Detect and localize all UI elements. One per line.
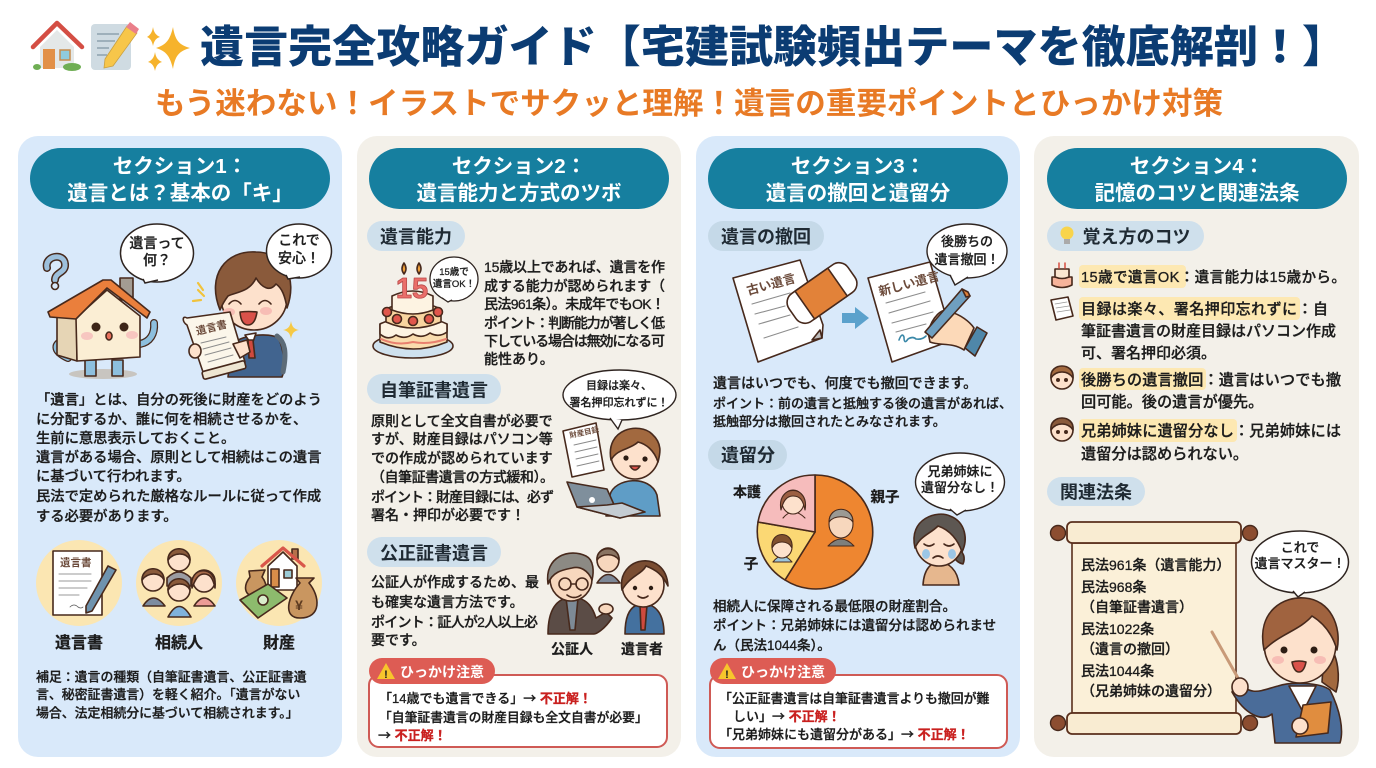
text: capacity: 能性あり。 [484, 351, 554, 367]
speech bubble: peace of mind: 安心！ [278, 250, 320, 266]
speech bubble: peace of mind: これで [278, 232, 320, 248]
section 1 heading: 遺言とは？基本の「キ」 [67, 182, 293, 205]
label: heirs: 相続人 [155, 634, 203, 652]
text: capacity: ポイント：判断能力が著しく低 [484, 315, 665, 331]
panel: section 2 [357, 136, 681, 757]
text: holographic will: での作成が認められています [371, 450, 553, 466]
icon: question mark [47, 257, 65, 290]
text: holographic will: すが、財産目録はパソコン等 [371, 431, 553, 447]
scroll text: legal articles: 民法968条 [1081, 579, 1146, 595]
pie portrait: spouse [780, 490, 806, 518]
text: statutory share: ポイント：兄弟姉妹には遺留分は認められませ [713, 617, 996, 633]
text: notarized will: 公証人が作成するため、最 [371, 574, 539, 590]
icon: small document [1051, 297, 1073, 320]
illustration: new will with hand and pen: 新しい遺言 [877, 268, 941, 299]
subheading: revocation: 遺言の撤回 [721, 227, 811, 247]
illustration: inventory and boy with laptop [563, 423, 660, 518]
title: 遺言完全攻略ガイド【宅建試験頻出テーマを徹底解剖！】 [200, 23, 1346, 72]
icon: sparkles emoji [147, 27, 190, 71]
panel: section 4 [1034, 136, 1359, 757]
icon: house emoji [33, 23, 82, 71]
section 4 heading: 記憶のコツと関連法条 [1094, 181, 1300, 205]
text: supplement note: 言、秘密証書遺言）を軽く紹介。「遺言がない [36, 687, 300, 702]
subheading: notarized will [367, 537, 501, 567]
text: notarized will: も確実な遺言方法です。 [371, 594, 524, 610]
tips: highlight bars [1079, 265, 1300, 442]
subheading: revocation [708, 221, 824, 251]
text: revocation: 抵触部分は撤回されたとみなされます。 [713, 414, 946, 429]
speech bubble: master: 遺言マスター！ [1254, 556, 1346, 571]
speech bubble: peace of mind [266, 224, 332, 279]
callout: trick warning 1: ! [384, 669, 388, 681]
scroll text: legal articles: （兄弟姉妹の遺留分） [1081, 683, 1221, 699]
speech bubble: what is a will: 何？ [143, 252, 171, 268]
section 3 heading: セクション3： [791, 155, 925, 178]
text: holographic will [371, 413, 554, 523]
text: statutory share [713, 598, 996, 653]
label: spouse: 本護 [733, 484, 761, 500]
arrow: old to new will [842, 307, 869, 329]
tip: later will [1081, 372, 1341, 411]
text: what is a will: に基づいて行われます。 [36, 468, 191, 485]
callout: trick warning 2: 「公正証書遺言は自筆証書遺言よりも撤回が難 [719, 691, 990, 706]
subheading: related articles: 関連法条 [1060, 482, 1132, 502]
label: child: 子 [744, 556, 758, 573]
text: notarized will [371, 574, 539, 648]
illustration: new will with hand and pen [868, 262, 987, 362]
subheading: statutory share [708, 440, 787, 470]
tip: siblings: 遺留分は認められない。 [1081, 446, 1248, 463]
speech bubble: master [1252, 531, 1348, 597]
illustration: testator [622, 561, 668, 634]
subtitle: もう迷わない！イラストでサクッと理解！遺言の重要ポイントとひっかけ対策 [155, 87, 1223, 121]
text: what is a will: に分配するか、誰に何を相続させるかを、 [36, 410, 307, 428]
section 3 heading: 遺言の撤回と遺留分 [766, 182, 951, 205]
callout: trick warning 1: ひっかけ注意 [400, 664, 484, 680]
icon: memo and pencil emoji [91, 22, 139, 70]
subheading: related articles [1047, 477, 1145, 506]
scroll text: legal articles: 民法1044条 [1081, 663, 1154, 679]
icon: assets house and money: ¥ [295, 597, 303, 613]
illustration: inventory and boy with laptop: 財産目録 [568, 424, 600, 440]
subheading: capacity: 遺言能力 [380, 227, 452, 247]
speech bubble: OK at 15: 15歳で [439, 266, 469, 278]
text: holographic will: 原則として全文自書が必要で [371, 413, 553, 429]
label: assets: 財産 [263, 633, 295, 652]
icon: heirs family [136, 540, 222, 626]
panel: section 1 [18, 136, 342, 757]
text: capacity: 民法961条）。未成年でもOK！ [484, 296, 665, 312]
speech bubble: OK at 15: 遺言OK！ [433, 278, 475, 290]
icon: small cake [1052, 263, 1072, 288]
text: notarized will: 要です。 [371, 632, 426, 648]
speech bubble: later will wins: 遺言撤回！ [934, 252, 1000, 267]
callout: trick warning 2: 「兄弟姉妹にも遺留分がある」→ 不正解！ [719, 724, 970, 743]
subheading: memory tips: 覚え方のコツ [1082, 226, 1190, 247]
speech bubble: inventory: 目録は楽々、 [586, 378, 652, 392]
illustration: happy man with will [183, 252, 299, 380]
text: what is a will: 「遺言」とは、自分の死後に財産をどのよう [36, 390, 322, 408]
subheading: statutory share: 遺留分 [721, 446, 775, 466]
tip: inventory [1081, 301, 1336, 362]
icon: will document [36, 540, 122, 626]
illustration: birthday cake: 15 [396, 273, 428, 305]
section 4 heading [1047, 148, 1347, 209]
scroll text: legal articles: 民法961条（遺言能力） [1081, 557, 1230, 573]
text: what is a will: する必要があります。 [36, 507, 178, 525]
callout: trick warning 2: ひっかけ注意 [741, 664, 825, 680]
subheading: capacity [367, 221, 465, 251]
illustration: teacher with pointer [1212, 598, 1342, 743]
illustration: witness [597, 548, 620, 583]
section 1 heading [30, 148, 330, 209]
text: capacity: 成する能力が認められます（ [484, 278, 665, 294]
tip: siblings [1081, 423, 1341, 463]
section 2 heading: 遺言能力と方式のツボ [416, 182, 622, 205]
text: holographic will: ポイント：財産目録には、必ず [371, 489, 554, 505]
callout: trick warning 1 [369, 658, 667, 747]
tip: inventory: 目録は楽々、署名押印忘れずに：自 [1081, 301, 1328, 318]
speech bubble: OK at 15 [430, 257, 478, 302]
illustration: birthday cake [373, 263, 453, 358]
text: capacity: 下している場合は無効になる可 [484, 333, 665, 349]
text: statutory share: 相続人に保障される最低限の財産割合。 [713, 598, 956, 614]
section 3 heading [708, 148, 1008, 209]
section 1 heading: セクション1： [113, 155, 247, 178]
text: what is a will: 民法で定められた厳格なルールに従って作成 [36, 487, 321, 505]
illustration: scroll with articles [1050, 522, 1258, 734]
label: testator: 遺言者 [621, 641, 663, 657]
label: notary: 公証人 [551, 641, 593, 657]
icon: small face 2 [1051, 418, 1073, 441]
illustration: old will with eraser [733, 258, 861, 362]
illustration: notary [548, 553, 613, 634]
tip: inventory: 筆証書遺言の財産目録はパソコン作成 [1081, 322, 1336, 340]
section 4 heading: セクション4： [1130, 155, 1264, 178]
subheading: memory tips [1047, 221, 1204, 251]
panel: section 3 [696, 136, 1020, 757]
text: supplement note: 場合、法定相続分に基づいて相続されます。」 [36, 706, 299, 720]
callout: trick warning 2: しい」→ 不正解！ [733, 706, 841, 725]
pie chart: statutory share [757, 475, 873, 589]
text: notarized will: ポイント：証人が2人以上必 [371, 614, 538, 630]
subheading: notarized will: 公正証書遺言 [380, 542, 488, 564]
text: capacity [484, 259, 665, 367]
speech bubble: master: これで [1281, 540, 1319, 555]
illustration: crying woman [914, 514, 965, 585]
scroll text: legal articles: （遺言の撤回） [1081, 641, 1179, 657]
icon: will document: 遺言書 [60, 556, 92, 569]
tip: siblings: 兄弟姉妹に遺留分なし：兄弟姉妹には [1081, 423, 1341, 440]
callout: trick warning 2: ! [725, 669, 729, 681]
speech bubble: inventory: 署名押印忘れずに！ [570, 395, 668, 409]
text: capacity: 15歳以上であれば、遺言を作 [484, 259, 665, 275]
speech bubble: inventory [563, 370, 676, 429]
tip: later will: 回可能。後の遺言が優先。 [1081, 393, 1263, 411]
text: revocation: ポイント：前の遺言と抵触する後の遺言があれば、 [713, 396, 1012, 411]
speech bubble: no share for siblings: 遺留分なし！ [921, 480, 999, 495]
text: holographic will: 署名・押印が必要です！ [371, 507, 525, 523]
subheading: holographic will [367, 374, 501, 404]
label: parents: 親子 [870, 489, 900, 506]
speech bubble: later will wins: 後勝ちの [941, 234, 993, 249]
speech bubble: no share for siblings: 兄弟姉妹に [927, 464, 993, 479]
section 2 heading: セクション2： [452, 155, 586, 178]
pie portrait: parent [828, 509, 854, 546]
section 2 heading [369, 148, 669, 209]
scroll text: legal articles [1081, 557, 1230, 699]
speech bubble: what is a will: 遺言って [129, 235, 185, 251]
illustration: happy man with will: 遺言書 [195, 318, 228, 338]
text: what is a will: 生前に意思表示しておくこと。 [36, 429, 235, 447]
illustration: old will with eraser: 古い遺言 [745, 270, 797, 298]
callout: trick warning 2 [710, 658, 1007, 748]
illustration: house character [48, 278, 154, 379]
text: supplement note: 補足：遺言の種類（自筆証書遺言、公正証書遺 [36, 670, 307, 684]
subheading: holographic will: 自筆証書遺言 [380, 380, 488, 400]
callout: trick warning 1: → 不正解！ [378, 725, 447, 744]
text: what is a will [36, 390, 322, 525]
tip: later will: 後勝ちの遺言撤回：遺言はいつでも撤 [1081, 372, 1341, 389]
scroll text: legal articles: 民法1022条 [1081, 621, 1154, 637]
text: what is a will: 遺言がある場合、原則として相続はこの遺言 [36, 448, 322, 466]
scroll text: legal articles: （自筆証書遺言） [1081, 599, 1193, 615]
tip: age 15: 15歳で遺言OK：遺言能力は15歳から。 [1081, 269, 1346, 286]
speech bubble: later will wins [927, 224, 1007, 285]
text: revocation: 遺言はいつでも、何度でも撤回できます。 [713, 375, 977, 391]
icon: assets house and money [236, 540, 322, 626]
tip: inventory: 可、署名押印必須。 [1081, 345, 1216, 362]
callout: trick warning 1: 「自筆証書遺言の財産目録も全文自書が必要」 [379, 710, 648, 725]
label: will document: 遺言書 [55, 633, 103, 652]
icon: small face 1 [1051, 366, 1073, 389]
speech bubble: what is a will [120, 224, 194, 283]
pie portrait: child [772, 534, 792, 562]
text: supplement note [36, 670, 307, 720]
speech bubble: no share for siblings [916, 453, 1004, 515]
text: holographic will: （自筆証書遺言の方式緩和）。 [371, 469, 554, 485]
text: revocation [713, 375, 1012, 429]
callout: trick warning 1: 「14歳でも遺言できる」→ 不正解！ [379, 688, 592, 707]
text: statutory share: ん（民法1044条）。 [713, 637, 831, 653]
